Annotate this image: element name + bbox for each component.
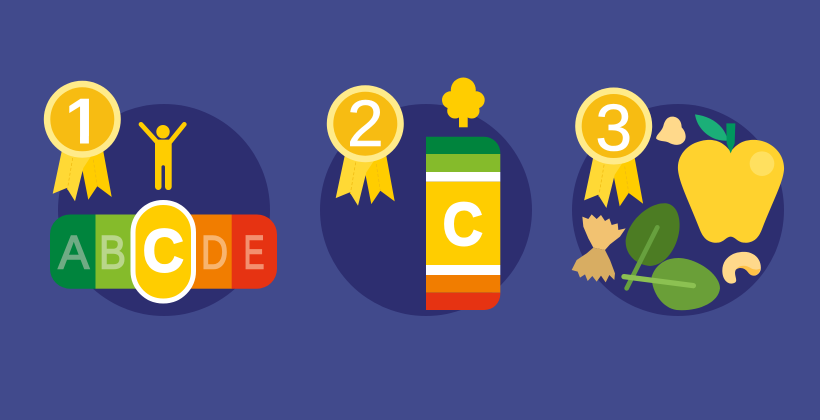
number 1: 1 <box>65 85 101 158</box>
icon: cashew <box>722 252 761 284</box>
letter C: C <box>143 218 184 284</box>
nutrition score bar A to E <box>50 202 277 301</box>
number 3: 3 <box>595 90 632 164</box>
panel: step 1 nutrition score <box>44 81 277 316</box>
icon: light spinach leaf <box>624 258 720 310</box>
medal 2 <box>327 85 404 206</box>
icon: dark spinach leaf <box>626 203 680 288</box>
icon: farfalle pasta <box>572 214 626 282</box>
panel: step 3 healthy foods <box>572 88 784 316</box>
medal 3 <box>575 88 652 208</box>
panel: step 2 front of pack label <box>320 78 532 316</box>
letter A: A <box>58 226 90 278</box>
background circle 2 <box>320 104 532 316</box>
food illustrations <box>624 114 784 310</box>
vertical nutrition score package <box>426 137 500 310</box>
icon: apple <box>678 114 784 243</box>
background circle 1 <box>58 104 270 316</box>
highlighted grade C pill <box>133 202 194 301</box>
letter B: B <box>99 226 126 278</box>
letter C on package: C <box>443 191 483 258</box>
icon: nut <box>656 117 686 145</box>
icon: person with raised arms <box>141 124 184 190</box>
medal 1 <box>44 81 121 201</box>
letter D: D <box>201 226 228 278</box>
number 2: 2 <box>347 86 384 160</box>
background circle 3 <box>572 104 784 316</box>
icon: broccoli <box>442 78 485 127</box>
letter E: E <box>244 226 264 278</box>
